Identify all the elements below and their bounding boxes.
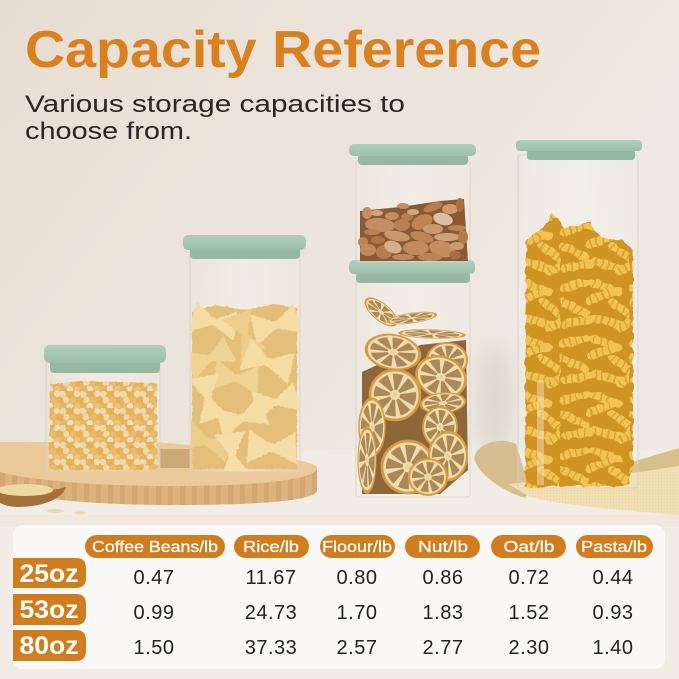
dried lemon slices <box>358 293 471 495</box>
jar: 25oz corn <box>44 345 166 471</box>
column headers: Rice/lb <box>243 539 299 556</box>
lid <box>349 144 476 165</box>
row labels <box>13 558 86 661</box>
values: 0.47 <box>134 567 174 589</box>
band below card <box>0 515 679 527</box>
values: 0.44 <box>593 567 633 589</box>
column headers <box>85 535 653 558</box>
column headers: Pasta/lb <box>581 539 647 556</box>
values: 37.33 <box>245 637 297 659</box>
column headers: Oat/lb <box>504 539 555 556</box>
wooden board <box>0 442 317 505</box>
capacity table card <box>13 525 665 669</box>
jar: 80oz fusilli <box>516 140 642 488</box>
subtitle: Various storage capacities to <box>25 91 405 118</box>
values: 24.73 <box>245 602 297 624</box>
jar: 53oz lemon slices <box>349 260 475 497</box>
jar: 53oz farfalle <box>181 235 306 480</box>
background wall <box>0 0 679 460</box>
values: 1.83 <box>423 602 463 624</box>
values: 0.93 <box>593 602 633 624</box>
almond filling <box>358 198 468 261</box>
values <box>134 567 633 659</box>
values: 0.86 <box>423 567 463 589</box>
column headers: Floour/lb <box>322 539 392 556</box>
table surface <box>0 450 679 679</box>
values: 1.50 <box>134 637 174 659</box>
row labels: 25oz <box>20 560 78 588</box>
column headers: Coffee Beans/lb <box>92 539 218 556</box>
values: 1.40 <box>593 637 633 659</box>
column headers: Nut/lb <box>418 539 468 556</box>
corn filling <box>49 381 157 470</box>
subtitle: choose from. <box>25 118 192 145</box>
lid <box>44 345 166 373</box>
wooden spoon <box>0 484 86 514</box>
jar: 25oz almonds <box>349 144 476 262</box>
values: 0.72 <box>509 567 549 589</box>
farfalle filling <box>191 302 299 471</box>
values: 1.52 <box>509 602 549 624</box>
lid <box>349 260 475 283</box>
values: 0.99 <box>134 602 174 624</box>
lid <box>183 235 306 259</box>
fusilli filling <box>525 212 633 487</box>
title: Capacity Reference <box>25 21 541 79</box>
values: 2.30 <box>509 637 549 659</box>
values: 11.67 <box>245 567 297 589</box>
row labels: 80oz <box>20 632 78 660</box>
values: 0.80 <box>337 567 377 589</box>
glass highlight <box>537 380 544 485</box>
values: 2.57 <box>337 637 377 659</box>
subtitle <box>25 91 405 145</box>
towel <box>474 441 679 515</box>
values: 2.77 <box>423 637 463 659</box>
row labels: 53oz <box>20 596 78 624</box>
wall shadow right of lemon jar <box>477 345 513 455</box>
values: 1.70 <box>337 602 377 624</box>
lid <box>516 140 642 160</box>
